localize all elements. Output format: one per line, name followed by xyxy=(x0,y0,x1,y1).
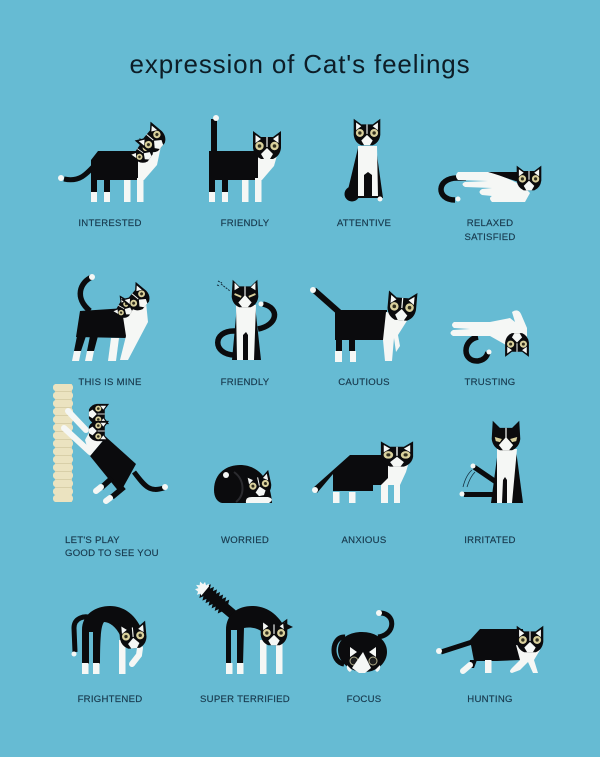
panel: focus xyxy=(334,610,392,705)
panel: let's play xyxy=(53,384,168,559)
label: RELAXED xyxy=(467,218,513,229)
cat: super terrified xyxy=(191,577,293,674)
label: HUNTING xyxy=(467,694,513,705)
panel: worried xyxy=(214,465,273,546)
panel: hunting xyxy=(436,626,543,705)
panel: interested xyxy=(58,122,169,229)
label: TRUSTING xyxy=(464,377,516,388)
cat: trusting on back xyxy=(450,310,529,361)
cat: focus from front xyxy=(334,610,392,673)
label: LET'S PLAY xyxy=(65,535,120,546)
label: WORRIED xyxy=(221,535,269,546)
label: SATISFIED xyxy=(464,232,516,243)
panel: irritated xyxy=(460,421,523,546)
label: INTERESTED xyxy=(78,218,142,229)
cat: scratching xyxy=(64,404,168,501)
cat: anxious low xyxy=(312,441,413,503)
cat: worried crouched xyxy=(214,465,273,503)
cat: friendly sitting two tails xyxy=(217,280,274,360)
label: IRRITATED xyxy=(464,535,516,546)
panel: anxious xyxy=(312,441,413,546)
cat: relaxed lying xyxy=(441,166,541,202)
panel: relaxed satisfied xyxy=(441,166,541,243)
label: ATTENTIVE xyxy=(337,218,391,229)
label: FRIENDLY xyxy=(221,377,270,388)
cat: friendly tail up xyxy=(209,115,281,202)
cat: irritated xyxy=(460,421,523,503)
panel: frightened xyxy=(72,606,147,705)
title: expression of Cat's feelings xyxy=(130,49,470,79)
icon: motion lines xyxy=(217,281,230,291)
label: SUPER TERRIFIED xyxy=(200,694,290,705)
cat: hunting xyxy=(436,626,543,673)
cat: attentive sitting xyxy=(346,119,383,202)
label: FOCUS xyxy=(347,694,381,705)
cat: cautious xyxy=(310,287,417,362)
cat: frightened arched xyxy=(72,606,147,674)
panel: friendly standing xyxy=(209,115,281,229)
label: CAUTIOUS xyxy=(338,377,390,388)
label: THIS IS MINE xyxy=(78,377,142,388)
panel: trusting xyxy=(450,310,529,388)
panel: attentive xyxy=(337,119,391,229)
cat: this is mine xyxy=(72,274,153,361)
panel: friendly sitting xyxy=(217,280,274,388)
icon: scratching post xyxy=(53,384,73,502)
label: ANXIOUS xyxy=(342,535,386,546)
label: GOOD TO SEE YOU xyxy=(65,548,159,559)
label: FRIENDLY xyxy=(221,218,270,229)
label: FRIGHTENED xyxy=(78,694,142,705)
panel: super terrified xyxy=(191,577,293,705)
cat: interested xyxy=(58,122,169,202)
panel: cautious xyxy=(310,287,417,388)
panel: this is mine xyxy=(72,274,153,388)
